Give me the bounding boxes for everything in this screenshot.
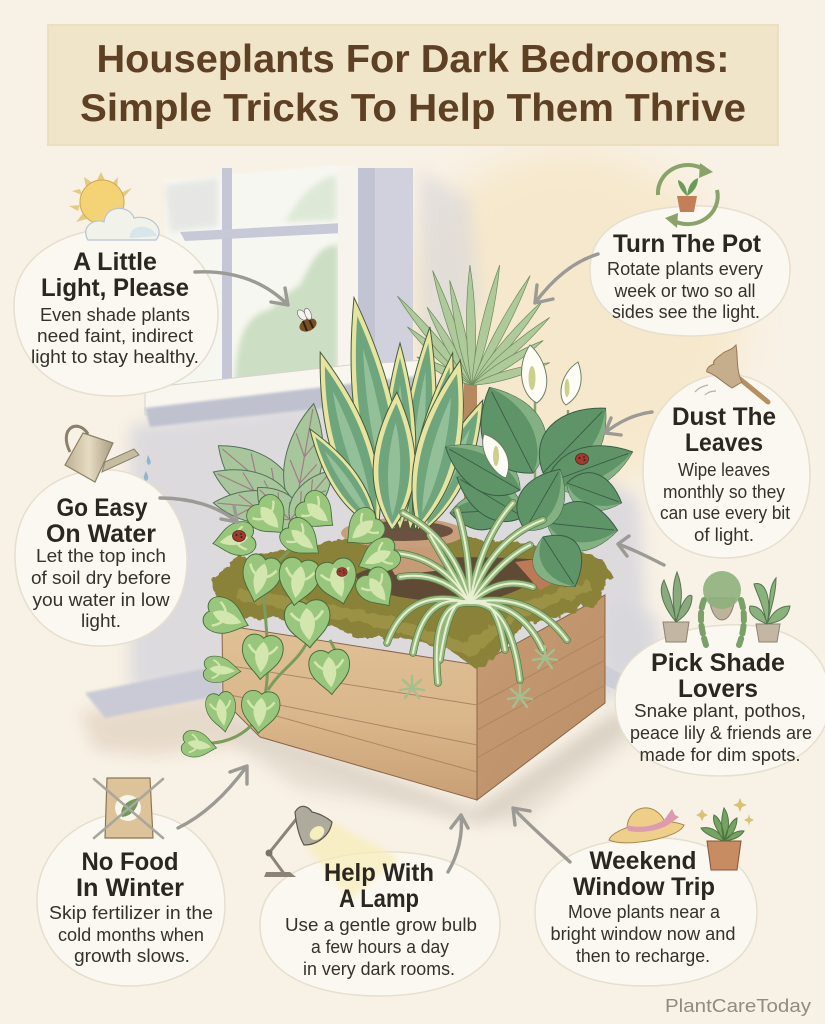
text block: Wipe leaves (678, 460, 770, 480)
text block (550, 902, 736, 966)
icon: watering can (65, 426, 151, 482)
text block: Move plants near a (568, 902, 721, 922)
text block: sides see the light. (612, 302, 760, 322)
arrow: help with a lamp (448, 815, 468, 872)
heading: On Water (46, 520, 156, 548)
text block: Snake plant, pothos, (634, 701, 806, 721)
bee (295, 307, 319, 334)
heading: Light, Please (41, 274, 189, 302)
baseboard (85, 665, 650, 718)
text block: Rotate plants every (607, 259, 763, 279)
icon: sun hat (609, 808, 684, 843)
text block: of light. (694, 525, 754, 545)
text block: growth slows. (74, 946, 190, 966)
wooden crate (222, 595, 605, 800)
icon: three shade plants (661, 571, 790, 645)
text block: light to stay healthy. (31, 347, 199, 367)
heading (41, 248, 189, 302)
callout: pick shade lovers (615, 571, 825, 776)
arrow: dust the leaves (605, 412, 652, 435)
text block: Skip fertilizer in the (49, 903, 213, 923)
moss (212, 530, 613, 670)
arrow: no food in winter (178, 766, 247, 828)
plant: pothos (180, 486, 404, 761)
plant: dracaena (394, 264, 553, 510)
heading: Lovers (678, 675, 758, 703)
text block: in very dark rooms. (303, 959, 455, 979)
text block: monthly so they (663, 482, 785, 502)
heading (324, 859, 434, 913)
text block: need faint, indirect (37, 326, 193, 346)
text block: of soil dry before (31, 568, 171, 588)
plant: snake plant (298, 294, 497, 538)
callout: dust the leaves (643, 345, 810, 558)
text block (49, 903, 213, 966)
text block: cold months when (58, 925, 204, 945)
plant: spider plant (387, 503, 567, 707)
text block: bright window now and (550, 924, 736, 944)
text block (285, 915, 477, 979)
heading: No Food (82, 848, 178, 876)
arrow: weekend window trip (513, 808, 570, 862)
text block: Let the top inch (36, 546, 166, 566)
heading: Pick Shade (651, 649, 785, 677)
planter shadow (225, 710, 630, 825)
heading (672, 403, 776, 457)
heading (46, 494, 156, 548)
text block: peace lily & friends are (630, 723, 812, 743)
plant: calathea (203, 400, 342, 542)
title: Houseplants For Dark Bedrooms: (96, 38, 730, 81)
heading: Window Trip (573, 873, 715, 901)
callout: a little light (14, 172, 218, 396)
heading: In Winter (76, 874, 184, 902)
text block (607, 259, 763, 322)
icon: desk lamp (264, 806, 400, 900)
heading: Weekend (590, 847, 696, 875)
icon: rotating pot (658, 163, 718, 228)
text block: you water in low (32, 590, 171, 610)
text block (630, 701, 812, 765)
plant: peace lily (435, 345, 640, 600)
heading (651, 649, 785, 703)
callout: go easy on water (15, 426, 187, 646)
title banner: Simple Tricks To Help Them Thrive (80, 87, 746, 130)
text block: Even shade plants (40, 305, 190, 325)
heading: Leaves (685, 429, 763, 457)
heading (76, 848, 184, 902)
heading (573, 847, 715, 901)
heading: Go Easy (56, 494, 148, 522)
text block: then to recharge. (576, 946, 710, 966)
arrow: a little light (195, 272, 288, 305)
window (145, 165, 425, 427)
callout: weekend window trip (535, 798, 757, 986)
heading: Turn The Pot (613, 230, 762, 258)
text block (31, 546, 171, 631)
watermark: PlantCareToday (665, 996, 811, 1016)
heading: Dust The (672, 403, 776, 431)
icon: sun and cloud (69, 172, 159, 240)
callout: turn the pot (590, 163, 790, 336)
arrow: pick shade lovers (618, 536, 664, 565)
text block: Use a gentle grow bulb (285, 915, 477, 935)
text block: light. (81, 611, 121, 631)
callout: no food in winter (37, 778, 225, 986)
title banner (48, 25, 778, 145)
heading: A Lamp (339, 885, 419, 913)
arrow: go easy on water (160, 498, 237, 522)
icon: feather duster (695, 345, 768, 402)
text block: a few hours a day (311, 937, 449, 957)
text block (660, 460, 790, 545)
callout: help with a lamp (260, 806, 500, 996)
text block (31, 305, 199, 367)
heading: Help With (324, 859, 434, 887)
pots (341, 518, 565, 590)
heading: A Little (73, 248, 157, 276)
arrow: turn the pot (535, 254, 598, 303)
text block: can use every bit (660, 503, 790, 523)
icon: potted plant with sparkles (696, 798, 754, 870)
text block: week or two so all (614, 281, 756, 301)
text block: made for dim spots. (640, 745, 800, 765)
icon: crossed out fertilizer bag (94, 778, 163, 838)
